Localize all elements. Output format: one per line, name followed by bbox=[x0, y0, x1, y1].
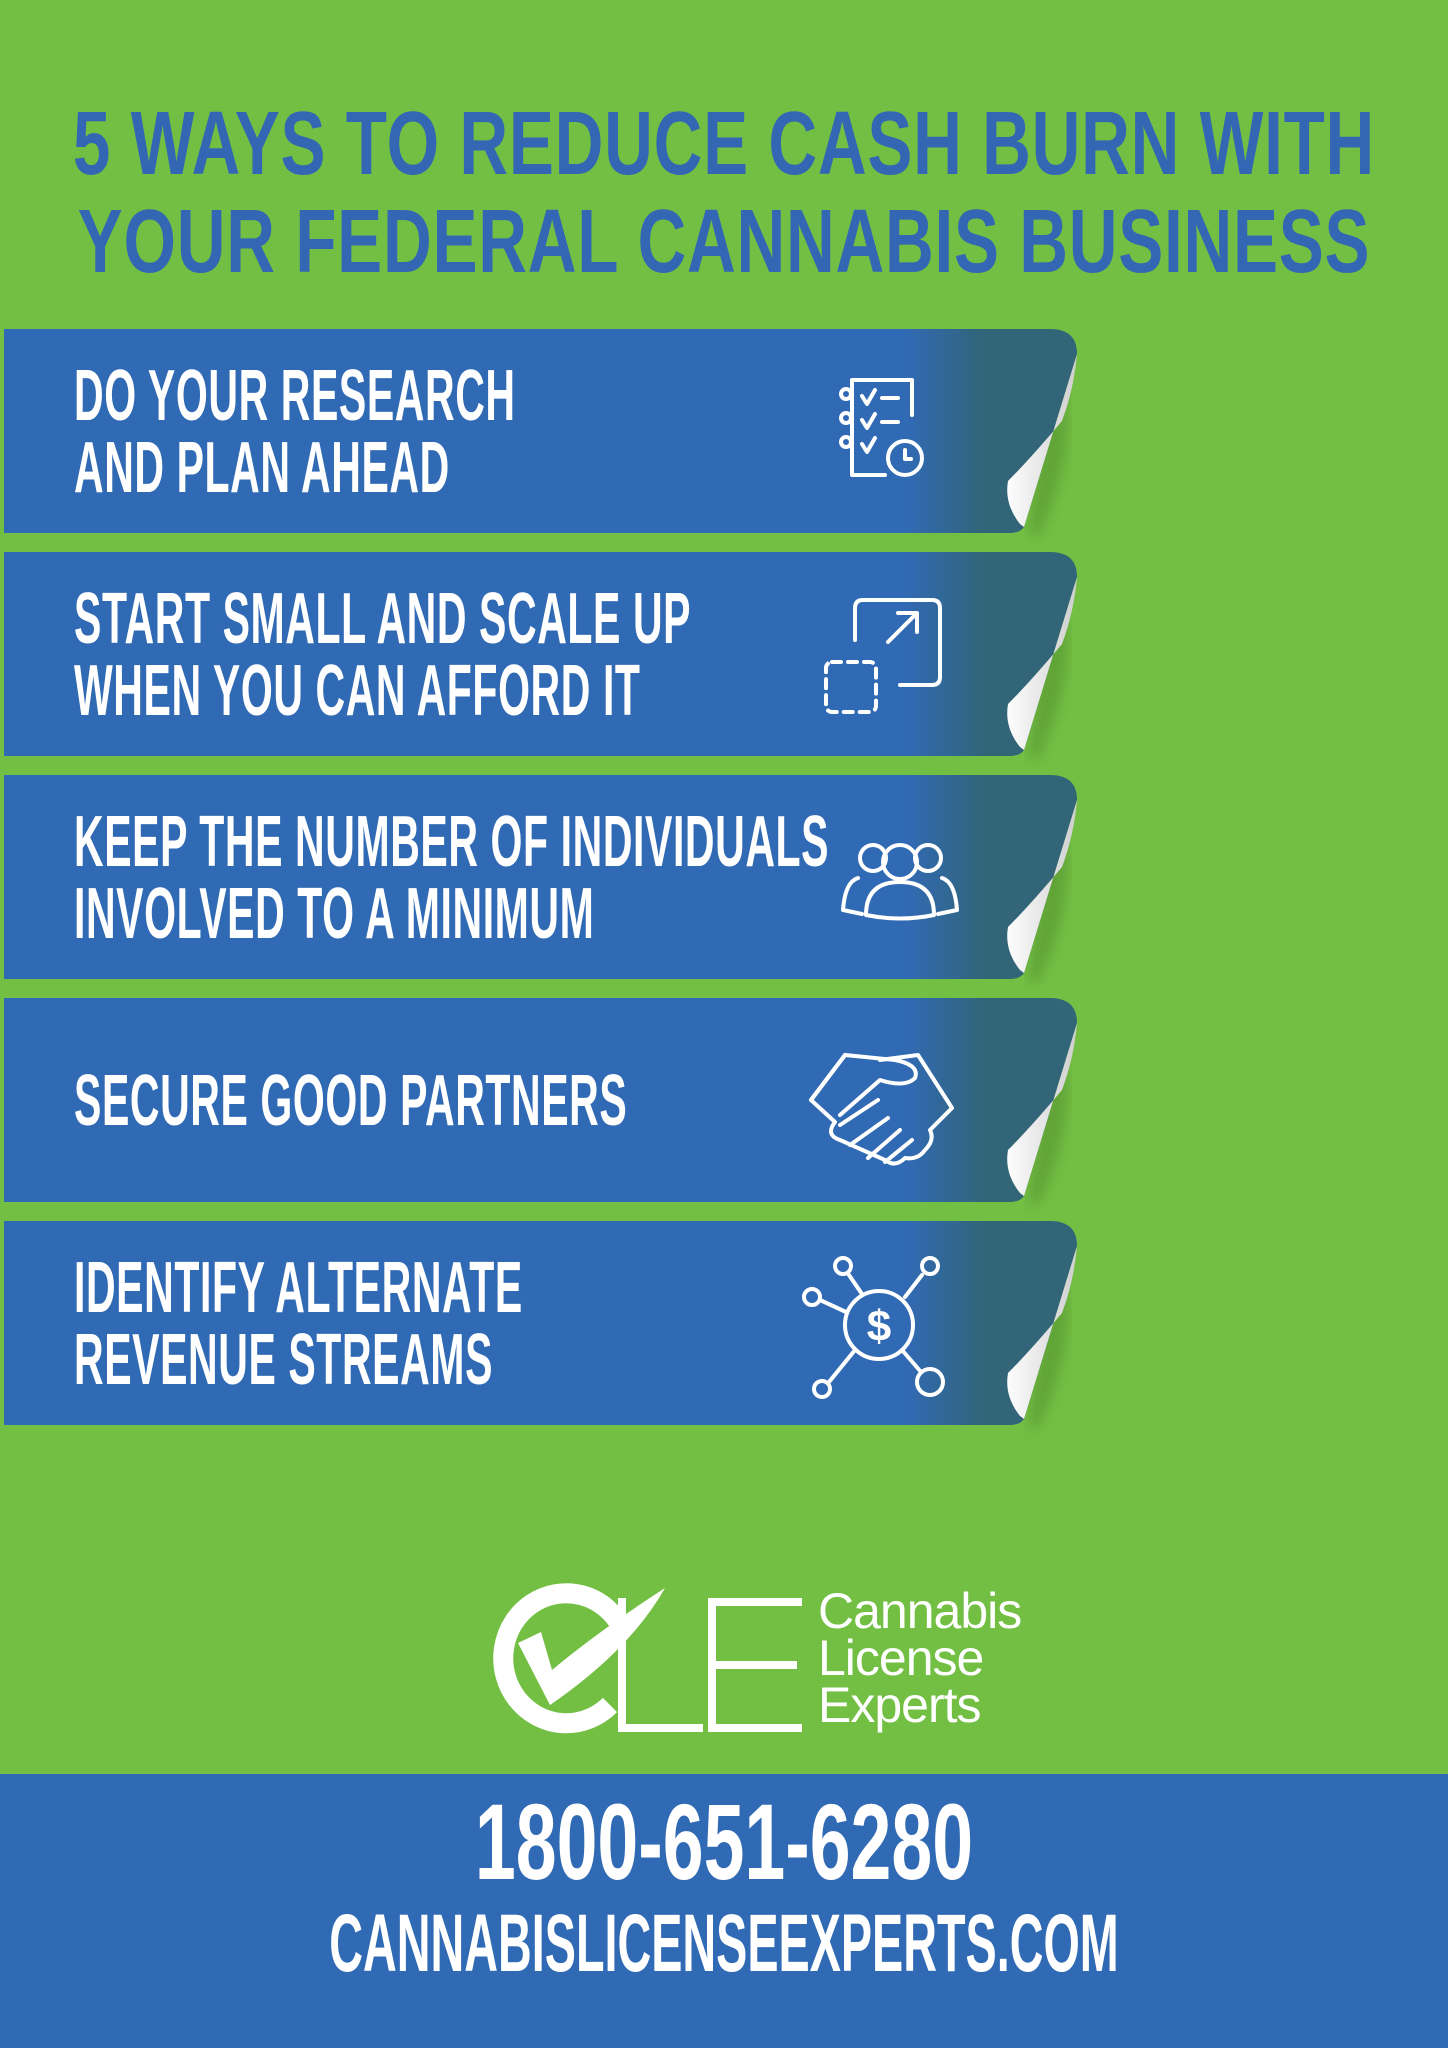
icon: revenue streams bbox=[804, 1258, 943, 1397]
logo text bbox=[818, 1583, 1021, 1733]
banner 4 bbox=[4, 998, 1077, 1206]
icon: handshake bbox=[811, 1055, 952, 1164]
logo text: Cannabis bbox=[818, 1583, 1021, 1639]
phone: 1800-651-6280 bbox=[475, 1781, 973, 1902]
icon: checklist bbox=[841, 380, 922, 475]
icon: revenue streams: $ bbox=[867, 1302, 891, 1351]
footer bbox=[0, 1774, 1448, 2048]
banner 3 bbox=[4, 775, 1077, 983]
banner text 3: INVOLVED TO A MINIMUM bbox=[74, 874, 594, 954]
logo text: License bbox=[818, 1630, 983, 1686]
title: YOUR FEDERAL CANNABIS BUSINESS bbox=[78, 192, 1370, 292]
banner 5 bbox=[4, 1221, 1077, 1429]
banner text 5: REVENUE STREAMS bbox=[74, 1320, 493, 1400]
logo mark bbox=[503, 1588, 802, 1728]
website: CANNABISLICENSEEXPERTS.COM bbox=[329, 1898, 1119, 1989]
banner text 1: DO YOUR RESEARCH bbox=[74, 356, 516, 436]
icon: scale up bbox=[826, 600, 940, 712]
icon: people bbox=[843, 845, 957, 918]
banner text 5: IDENTIFY ALTERNATE bbox=[74, 1248, 523, 1328]
banner 1 bbox=[4, 329, 1077, 537]
banner text 4: SECURE GOOD PARTNERS bbox=[74, 1061, 627, 1141]
banner text 2: START SMALL AND SCALE UP bbox=[74, 579, 691, 659]
banner text 1: AND PLAN AHEAD bbox=[74, 428, 450, 508]
banner text 1 bbox=[74, 356, 516, 508]
title: 5 WAYS TO REDUCE CASH BURN WITH bbox=[73, 94, 1375, 194]
banner text 3 bbox=[74, 802, 829, 954]
title bbox=[73, 94, 1375, 292]
logo text: Experts bbox=[818, 1677, 981, 1733]
banner text 5 bbox=[74, 1248, 523, 1400]
banner text 2 bbox=[74, 579, 691, 731]
banner text 2: WHEN YOU CAN AFFORD IT bbox=[74, 651, 641, 731]
banner text 3: KEEP THE NUMBER OF INDIVIDUALS bbox=[74, 802, 829, 882]
banner 2 bbox=[4, 552, 1077, 760]
